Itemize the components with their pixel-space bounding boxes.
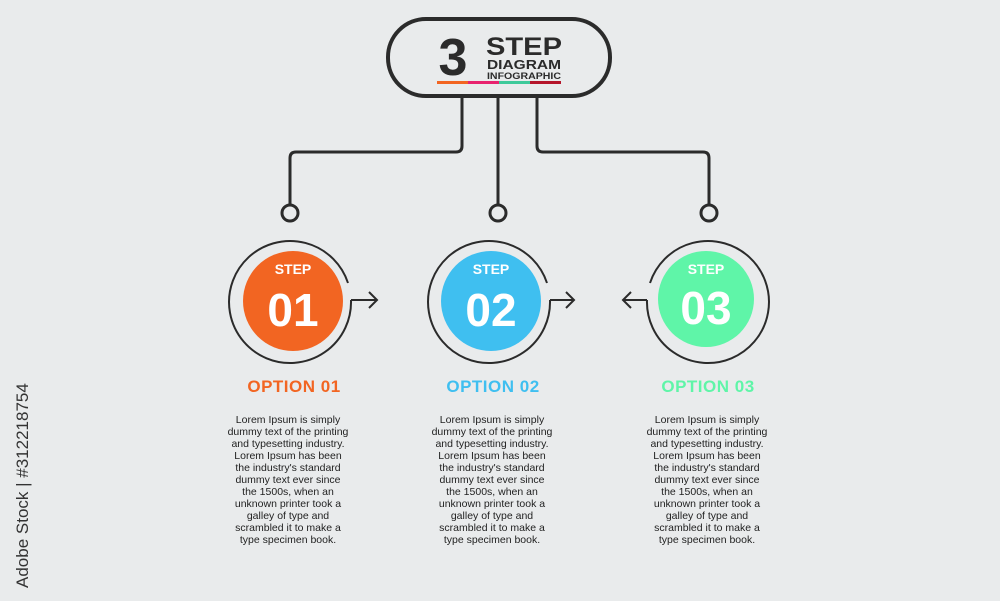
- text 1: galley of type and: [247, 510, 329, 522]
- step 2: STEP: [473, 261, 509, 277]
- text 2: type specimen book.: [444, 534, 540, 546]
- text 3: Lorem Ipsum is simply: [655, 414, 759, 426]
- text 2: unknown printer took a: [439, 498, 545, 510]
- text 2: Lorem Ipsum has been: [438, 450, 546, 462]
- title pill: DIAGRAM: [487, 57, 561, 72]
- step 1: STEP: [275, 261, 311, 277]
- option 1 heading: OPTION 01: [247, 377, 341, 396]
- text 2: the 1500s, when an: [446, 486, 538, 498]
- option 2 heading: OPTION 02: [446, 377, 540, 396]
- title pill: STEP: [486, 33, 562, 61]
- text 3: dummy text ever since: [654, 474, 760, 486]
- text 2: scrambled it to make a: [439, 522, 545, 534]
- text 3: type specimen book.: [659, 534, 755, 546]
- text 3: [647, 414, 767, 546]
- connector lines: [282, 96, 717, 221]
- title pill: INFOGRAPHIC: [487, 71, 561, 82]
- text 2: dummy text ever since: [439, 474, 545, 486]
- title pill: [388, 19, 610, 96]
- text 1: scrambled it to make a: [235, 522, 341, 534]
- text 2: galley of type and: [451, 510, 533, 522]
- text 2: Lorem Ipsum is simply: [440, 414, 544, 426]
- text 3: dummy text of the printing: [647, 426, 767, 438]
- text 1: type specimen book.: [240, 534, 336, 546]
- text 1: dummy text of the printing: [228, 426, 348, 438]
- option 3 heading: OPTION 03: [661, 377, 755, 396]
- side watermark id: Adobe Stock | #312218754: [13, 383, 32, 588]
- text 3: Lorem Ipsum has been: [653, 450, 761, 462]
- text 3: and typesetting industry.: [650, 438, 764, 450]
- text 2: and typesetting industry.: [435, 438, 549, 450]
- text 1: unknown printer took a: [235, 498, 341, 510]
- text 2: dummy text of the printing: [432, 426, 552, 438]
- text 3: scrambled it to make a: [654, 522, 760, 534]
- text 1: and typesetting industry.: [231, 438, 345, 450]
- text 1: the 1500s, when an: [242, 486, 334, 498]
- step 2: 02: [465, 284, 517, 336]
- text 1: Lorem Ipsum is simply: [236, 414, 340, 426]
- step 3: STEP: [688, 261, 724, 277]
- text 2: [432, 414, 552, 546]
- text 3: galley of type and: [666, 510, 748, 522]
- text 1: the industry's standard: [235, 462, 341, 474]
- text 2: the industry's standard: [439, 462, 545, 474]
- text 3: the industry's standard: [654, 462, 760, 474]
- title pill: 3: [439, 29, 467, 87]
- text 1: dummy text ever since: [235, 474, 341, 486]
- text 1: [228, 414, 348, 546]
- text 1: Lorem Ipsum has been: [234, 450, 342, 462]
- step 2: [428, 241, 574, 363]
- text 3: the 1500s, when an: [661, 486, 753, 498]
- text 3: unknown printer took a: [654, 498, 760, 510]
- step 1: 01: [267, 284, 319, 336]
- step 1: [229, 241, 377, 363]
- step 3: 03: [680, 282, 732, 334]
- step 3: [623, 241, 769, 363]
